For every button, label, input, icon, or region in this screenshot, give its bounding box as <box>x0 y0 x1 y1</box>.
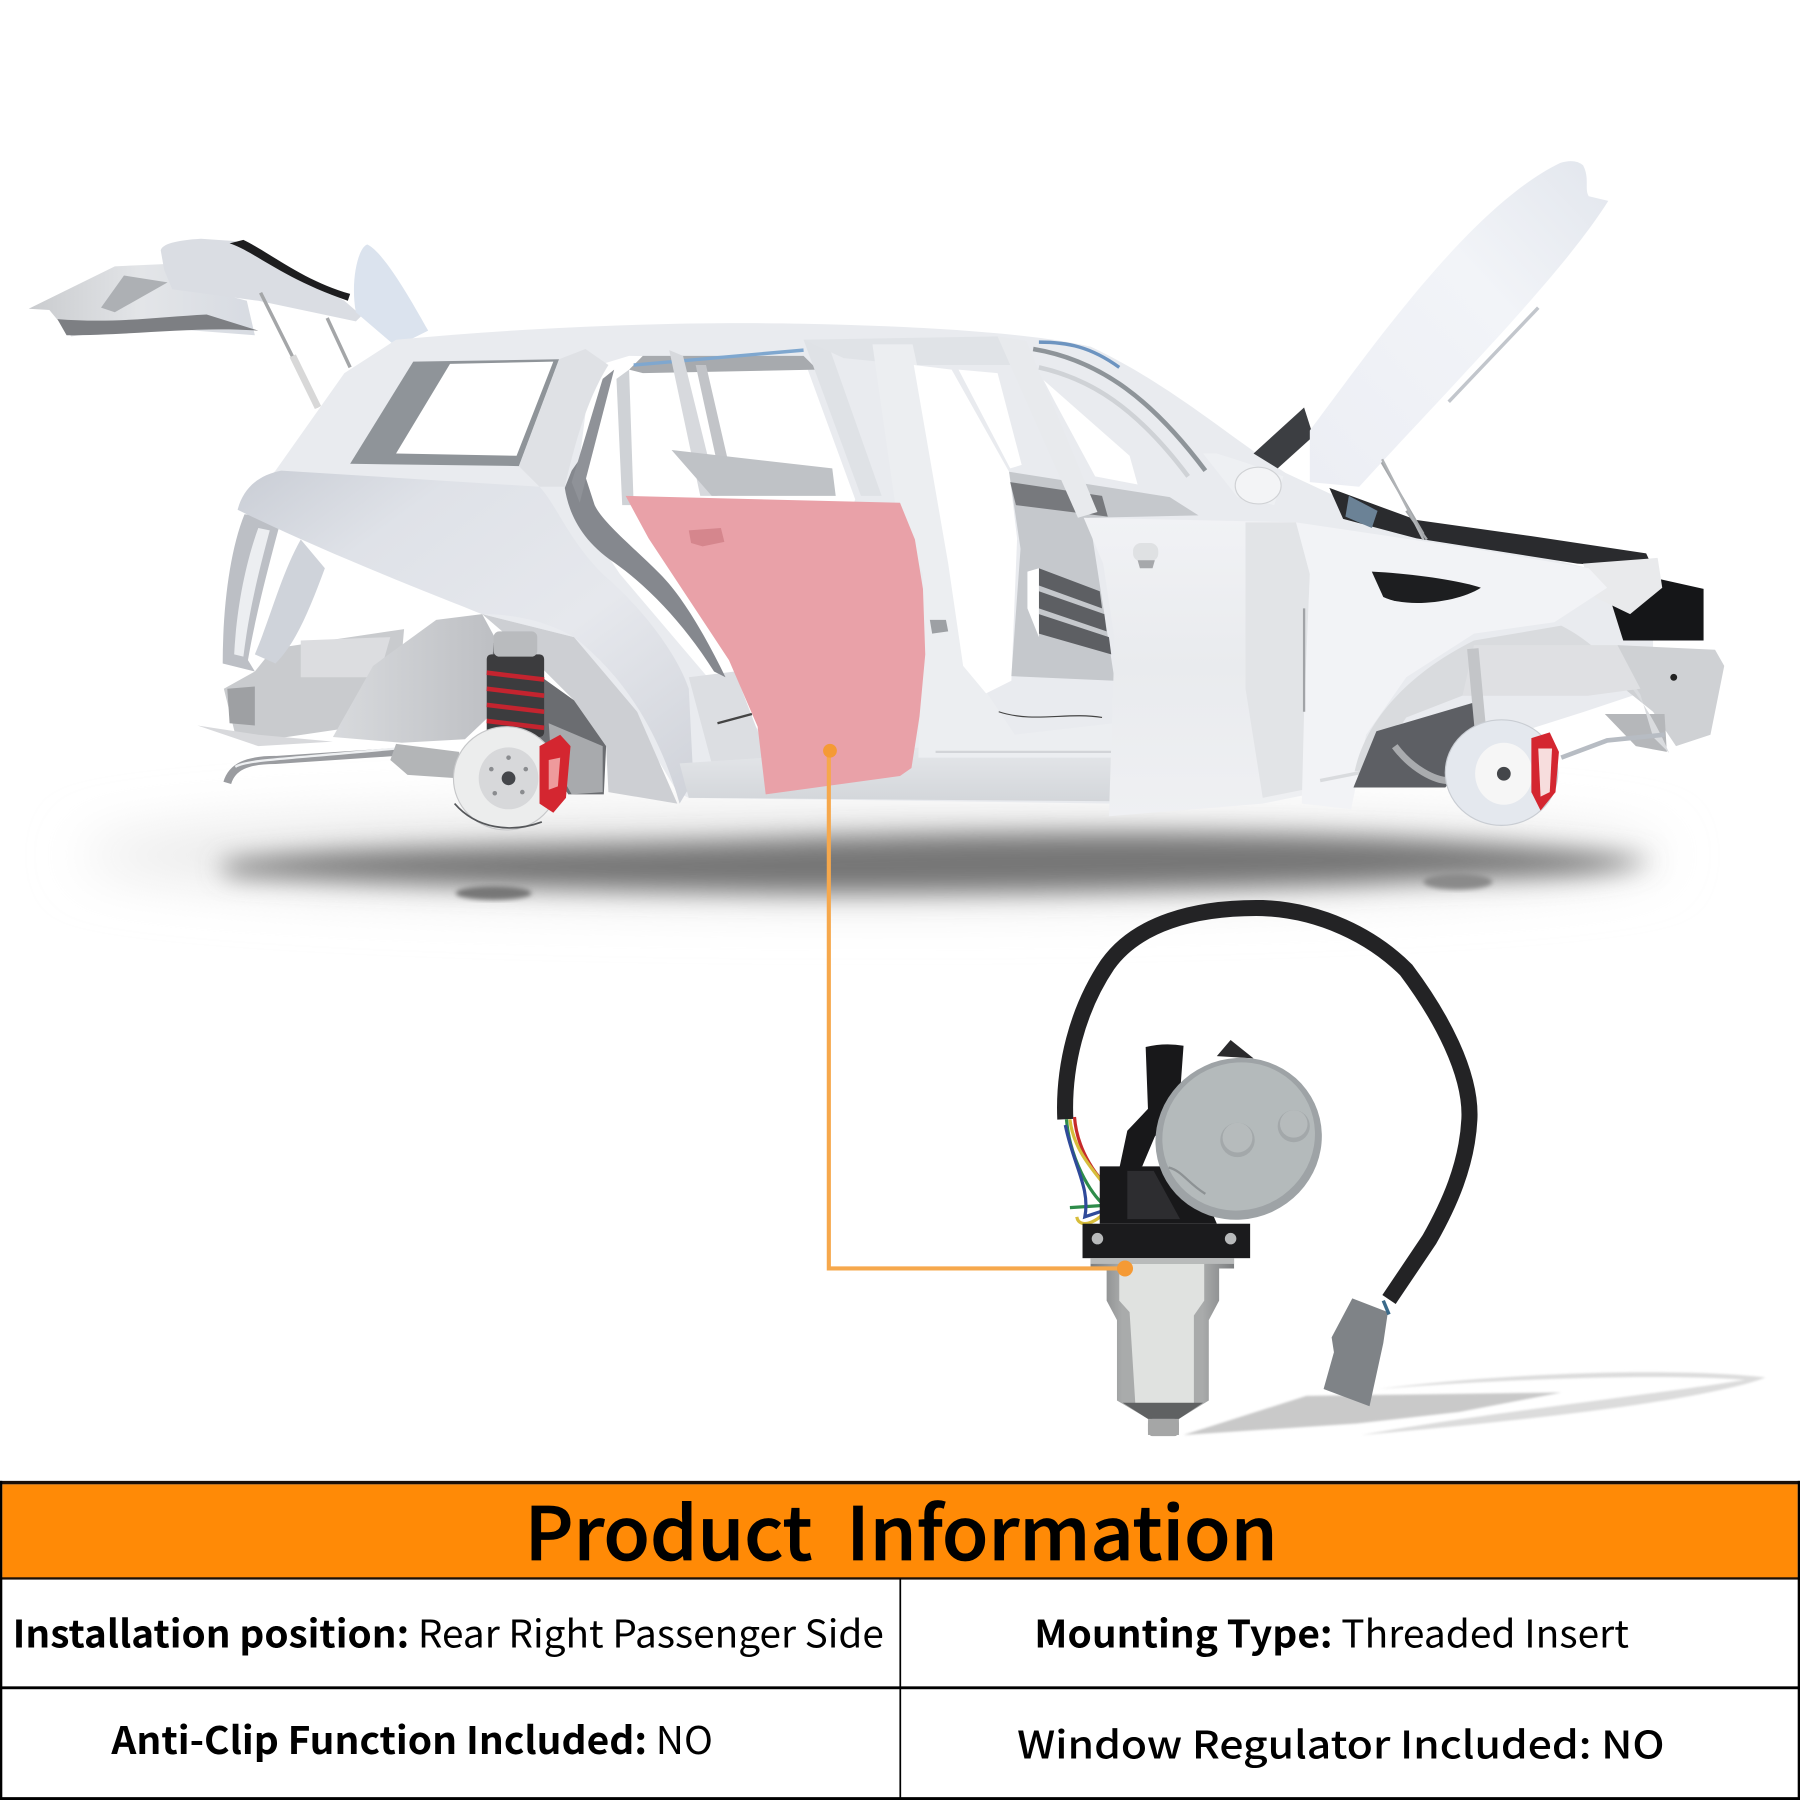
cell: window regulator: Window Regulator Included: NO <box>1017 1715 1665 1770</box>
rear inner arch liner <box>333 614 496 743</box>
front brake disc <box>1445 720 1559 825</box>
front interior panel <box>1009 472 1198 681</box>
cell: anti-clip function: Anti-Clip Function Included: NO <box>110 1710 713 1765</box>
rear brake disc <box>453 727 571 830</box>
rear coil spring <box>487 631 603 794</box>
door jamb recess <box>565 459 726 677</box>
rear door opening <box>574 340 882 767</box>
C pillar <box>519 349 608 487</box>
front inner arch liner <box>1353 626 1669 788</box>
product information table <box>0 1476 1800 1800</box>
cell: installation position: Installation position: Rear Right Passenger Side <box>13 1603 884 1658</box>
table heading: Product Information <box>525 1476 1278 1582</box>
bracket <box>1083 1224 1250 1258</box>
cable <box>1065 908 1470 1299</box>
terminal block <box>1100 1166 1217 1224</box>
main body base <box>238 323 1653 804</box>
mounting tab <box>1217 1040 1254 1058</box>
car body shell <box>29 161 1724 830</box>
connector <box>1324 1298 1388 1406</box>
gear cover <box>1129 1031 1349 1247</box>
table frame <box>0 1481 1800 1800</box>
rear quarter panel <box>238 471 693 804</box>
rear frame hoop and floor <box>197 514 459 783</box>
front side windows <box>959 336 1283 518</box>
motor can <box>1091 1258 1234 1435</box>
engine bay <box>1329 459 1724 752</box>
window motor shadow <box>1184 1372 1766 1435</box>
sill <box>680 735 1116 801</box>
front fender <box>1296 522 1607 809</box>
highlighted rear door <box>626 496 925 794</box>
ground shadow under car <box>80 812 1665 900</box>
hood open <box>1254 161 1608 540</box>
B pillar and centre <box>804 336 1114 758</box>
window motor <box>1065 908 1470 1436</box>
cell: mounting type: Mounting Type: Threaded Insert <box>1034 1603 1629 1658</box>
rear side window <box>350 359 559 466</box>
door handle <box>689 528 724 546</box>
tailgate open <box>29 239 428 408</box>
black post <box>1119 1044 1184 1169</box>
coloured wires <box>1065 1117 1119 1224</box>
front door <box>1084 518 1342 816</box>
orange connector line <box>823 744 1133 1277</box>
